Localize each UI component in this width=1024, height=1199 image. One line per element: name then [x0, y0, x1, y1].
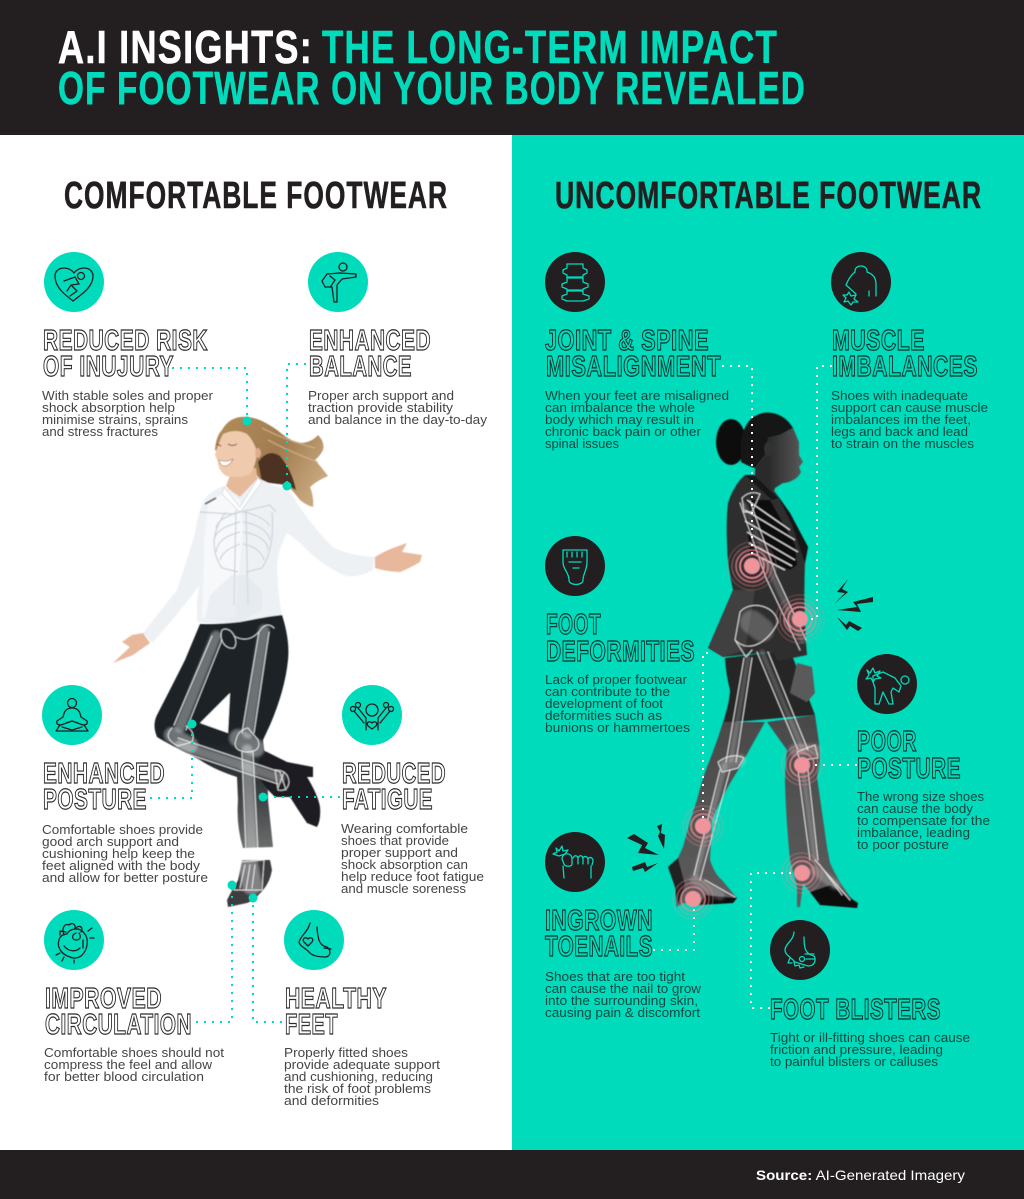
item: foot deformities: bunions or hammertoes	[545, 721, 690, 735]
icon: toes	[545, 832, 605, 892]
item: reduced risk of injury: REDUCED RISK	[43, 325, 208, 357]
item: reduced fatigue: proper support and	[341, 846, 458, 860]
item: foot deformities	[545, 536, 695, 735]
item: foot deformities: DEFORMITIES	[546, 636, 695, 668]
item: healthy feet: and cushioning, reducing	[284, 1070, 433, 1084]
item: reduced fatigue: help reduce foot fatigue	[341, 870, 484, 884]
item: reduced risk of injury: With stable soles and proper	[42, 389, 213, 403]
source credit: Source: AI-Generated Imagery	[756, 1167, 965, 1183]
item: improved circulation: Comfortable shoes should not	[44, 1046, 225, 1060]
item: ingrown toenails: TOENAILS	[545, 931, 653, 963]
panel: right background	[512, 135, 1024, 1150]
pain spots	[673, 542, 824, 919]
icon: pain bolts upper right	[834, 579, 873, 631]
hair	[741, 413, 793, 468]
connector lines left	[150, 364, 340, 1022]
item: ingrown toenails: can cause the nail to grow	[545, 982, 702, 996]
panel: uncomfortable footwear problems	[545, 252, 990, 1069]
back leg	[668, 722, 765, 907]
lower shoe	[227, 860, 272, 907]
header band	[0, 0, 1024, 135]
item: enhanced balance: Proper arch support and	[308, 389, 454, 403]
item: joint and spine misalignment: spinal issues	[545, 437, 619, 451]
item: healthy feet: Properly fitted shoes	[284, 1046, 408, 1060]
icon: back pain	[831, 252, 891, 312]
item: enhanced posture: cushioning help keep the	[42, 847, 195, 861]
footer	[0, 1150, 1024, 1199]
skeleton: ribcage on shirt	[200, 505, 276, 605]
icon: foot sole	[545, 536, 605, 596]
item: reduced risk of injury: minimise strains, sprains	[42, 413, 188, 427]
item: reduced fatigue: Wearing comfortable	[341, 822, 468, 836]
item: reduced fatigue: and muscle soreness	[341, 882, 466, 896]
icon: heart with runner	[44, 252, 104, 312]
icon: hunched person	[857, 654, 917, 714]
item: reduced fatigue: FATIGUE	[342, 784, 433, 816]
item: foot deformities: deformities such as	[545, 709, 662, 723]
icon: balance pose	[308, 252, 368, 312]
item: muscle imbalances: support can cause muscle	[831, 401, 988, 415]
item: muscle imbalances: imbalances im the feet,	[831, 413, 971, 427]
item: enhanced posture: POSTURE	[43, 784, 147, 816]
item: enhanced balance	[308, 252, 488, 427]
panel: comfortable footwear benefits	[42, 252, 488, 1108]
item: poor posture: The wrong size shoes	[857, 790, 984, 804]
item: improved circulation	[44, 910, 225, 1084]
title	[58, 21, 806, 114]
item: poor posture: to poor posture	[857, 838, 949, 852]
item: ingrown toenails: INGROWN	[545, 905, 653, 937]
shirt	[143, 478, 375, 643]
item: foot deformities: development of foot	[545, 697, 664, 711]
item: improved circulation: IMPROVED	[45, 983, 162, 1015]
item: enhanced posture: Comfortable shoes provide	[42, 823, 203, 837]
item: joint and spine misalignment: JOINT & SPINE	[545, 325, 709, 357]
item: poor posture: POOR	[857, 726, 917, 758]
figure: happy woman with skeleton overlay	[113, 417, 422, 907]
item: reduced risk of injury	[42, 252, 213, 439]
item: foot deformities: FOOT	[546, 609, 601, 641]
neck	[226, 468, 258, 500]
connector lines right	[653, 366, 857, 1008]
figure: walking woman with skeleton overlay	[668, 413, 858, 919]
item: improved circulation: CIRCULATION	[45, 1009, 192, 1041]
item: joint and spine misalignment: body which may result in	[545, 413, 694, 427]
skirt	[723, 650, 815, 723]
icon: foot with blisters	[770, 920, 830, 980]
item: healthy feet: the risk of foot problems	[284, 1082, 431, 1096]
icon: anatomical heart	[44, 910, 104, 970]
item: healthy feet: FEET	[285, 1009, 338, 1041]
item: reduced fatigue	[341, 685, 484, 896]
item: muscle imbalances: Shoes with inadequate	[831, 389, 968, 403]
item: joint and spine misalignment: When your feet are misaligned	[545, 389, 729, 403]
item: enhanced balance: traction provide stability	[308, 401, 454, 415]
item: foot blisters: FOOT BLISTERS	[770, 994, 941, 1026]
item: poor posture: can cause the body	[857, 802, 974, 816]
face	[215, 431, 257, 477]
jacket	[708, 475, 808, 661]
pants	[154, 613, 288, 848]
item: enhanced balance: BALANCE	[309, 351, 412, 383]
item: enhanced posture: feet aligned with the body	[42, 859, 201, 873]
item: foot blisters: Tight or ill-fitting shoes can cause	[770, 1031, 970, 1045]
item: enhanced posture: good arch support and	[42, 835, 179, 849]
upper shoe	[255, 750, 320, 827]
face and neck	[755, 428, 803, 495]
icon: pain bolts lower left	[627, 824, 665, 872]
item: joint and spine misalignment	[545, 252, 729, 451]
front leg	[767, 715, 858, 908]
item: muscle imbalances: MUSCLE	[832, 325, 925, 357]
icon: foot with heart	[284, 910, 344, 970]
skeleton: arm and leg bones	[694, 493, 850, 900]
item: healthy feet	[284, 910, 441, 1108]
item: reduced risk of injury: OF INUJURY	[43, 351, 174, 383]
item: joint and spine misalignment: chronic back pain or other	[545, 425, 701, 439]
title: A.I INSIGHTS:	[58, 21, 313, 73]
title: THE LONG-TERM IMPACT	[322, 21, 778, 73]
item: healthy feet: provide adequate support	[284, 1058, 441, 1072]
item: muscle imbalances: legs and back and lead	[831, 425, 968, 439]
hair bun	[716, 419, 746, 465]
item: foot blisters: friction and pressure, leading	[770, 1043, 943, 1057]
item: reduced risk of injury: shock absorption help	[42, 401, 175, 415]
item: muscle imbalances: to strain on the muscles	[831, 437, 974, 451]
connector dots left	[188, 416, 292, 902]
icon: meditation	[42, 685, 102, 745]
item: poor posture	[857, 654, 990, 852]
hand	[790, 663, 815, 702]
item: improved circulation: for better blood circulation	[44, 1070, 204, 1084]
item: improved circulation: compress the feel and allow	[44, 1058, 213, 1072]
item: ingrown toenails: causing pain & discomfort	[545, 1006, 701, 1020]
heading: comfortable footwear: COMFORTABLE FOOTWEAR	[64, 175, 448, 217]
item: foot blisters: to painful blisters or calluses	[770, 1055, 938, 1069]
item: poor posture: POSTURE	[857, 753, 961, 785]
item: healthy feet: and deformities	[284, 1094, 379, 1108]
hair	[215, 417, 328, 507]
item: ingrown toenails: Shoes that are too tight	[545, 970, 686, 984]
hands	[375, 543, 422, 572]
skeleton: leg bones	[168, 625, 289, 890]
item: ingrown toenails	[545, 832, 702, 1020]
item: reduced fatigue: shoes that provide	[341, 834, 449, 848]
item: enhanced balance: and balance in the day-to-day	[308, 413, 488, 427]
icon: person with raised arms	[342, 685, 402, 745]
item: joint and spine misalignment: MISALIGNMENT	[546, 351, 721, 383]
item: joint and spine misalignment: can imbalance the whole	[545, 401, 695, 415]
item: enhanced posture: and allow for better posture	[42, 871, 208, 885]
item: reduced fatigue: shock absorption can	[341, 858, 468, 872]
item: foot blisters	[770, 920, 970, 1069]
item: poor posture: imbalance, leading	[857, 826, 970, 840]
icon: spine	[545, 252, 605, 312]
item: foot deformities: can contribute to the	[545, 685, 670, 699]
item: poor posture: to compensate for the	[857, 814, 990, 828]
item: reduced risk of injury: and stress fractures	[42, 425, 158, 439]
item: reduced fatigue: REDUCED	[342, 758, 446, 790]
skeleton: ribcage	[745, 500, 798, 570]
item: muscle imbalances	[831, 252, 988, 451]
item: enhanced posture: ENHANCED	[43, 758, 165, 790]
item: healthy feet: HEALTHY	[285, 983, 387, 1015]
item: enhanced balance: ENHANCED	[309, 325, 431, 357]
item: foot deformities: Lack of proper footwear	[545, 673, 687, 687]
item: enhanced posture	[42, 685, 208, 885]
item: ingrown toenails: into the surrounding skin,	[545, 994, 698, 1008]
